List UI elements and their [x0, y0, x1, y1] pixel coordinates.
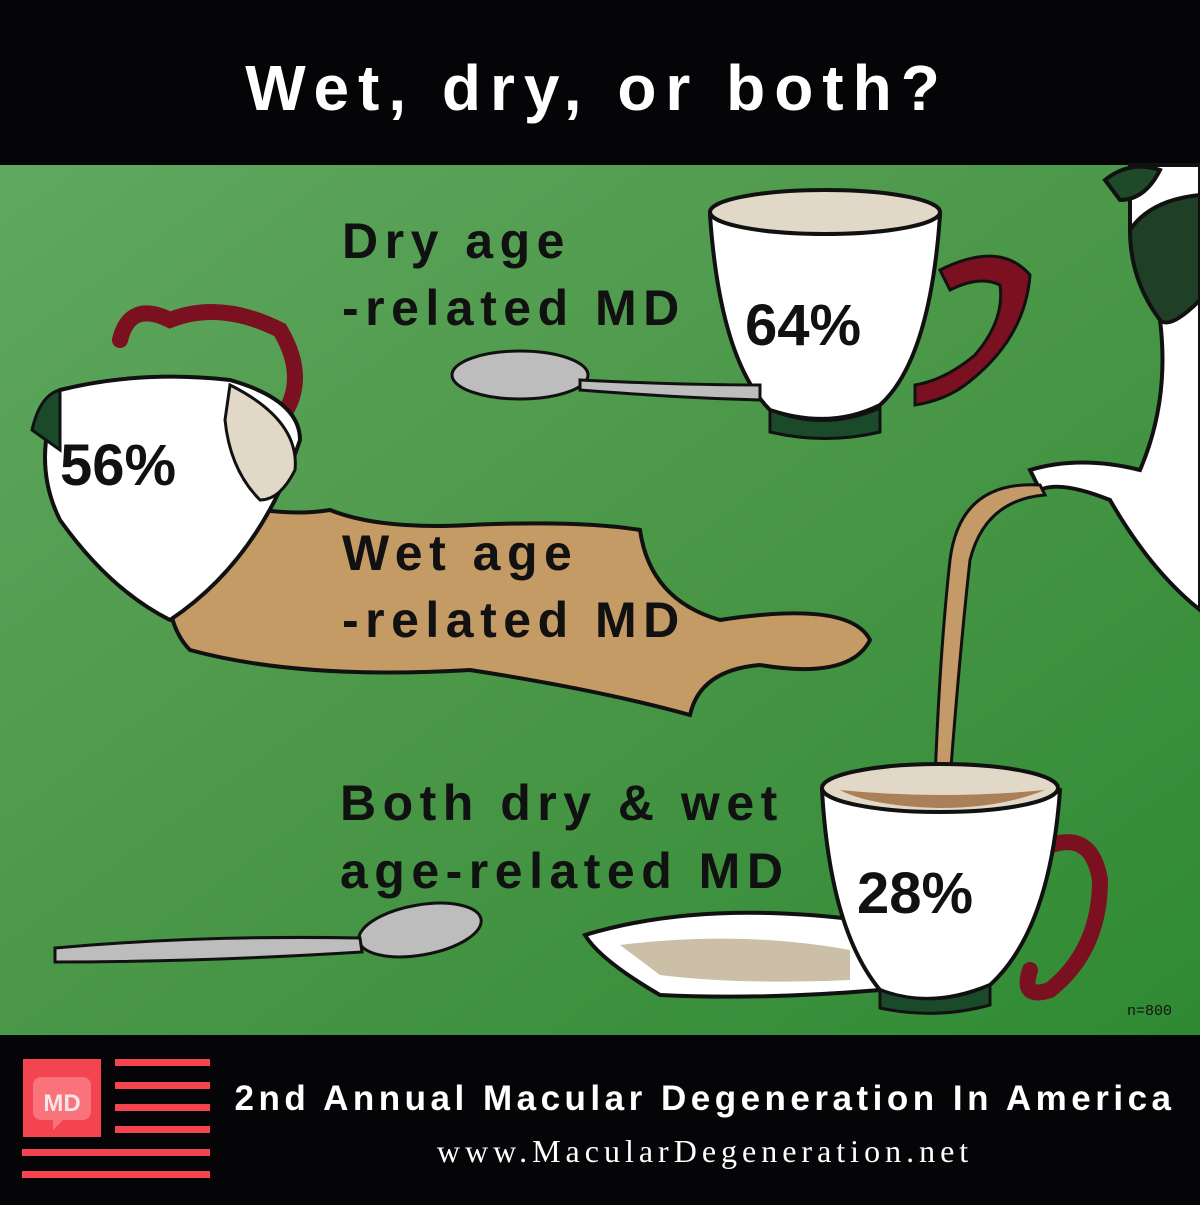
footer logo	[22, 1059, 210, 1178]
label: both: Both dry & wet	[340, 775, 784, 831]
title: Wet, dry, or both?	[245, 52, 949, 124]
footer title: 2nd Annual Macular Degeneration In America	[234, 1079, 1176, 1118]
label: wet: -related MD	[342, 592, 686, 648]
cup: wet 56%	[32, 312, 300, 620]
footer url: www.MacularDegeneration.net	[437, 1133, 973, 1169]
spoon bottom	[55, 895, 485, 965]
value 28%: 28%	[857, 861, 973, 926]
value 64%: 64%	[745, 293, 861, 358]
value 56%: 56%	[60, 433, 176, 498]
spoon top	[452, 351, 760, 400]
cup: dry 64%	[710, 190, 1030, 438]
green background panel	[0, 165, 1200, 1035]
label: both: age-related MD	[340, 843, 789, 899]
footer logo: MD	[43, 1090, 81, 1117]
label: dry: Dry age	[342, 213, 571, 269]
label: dry: -related MD	[342, 280, 686, 336]
teapot pouring	[935, 165, 1200, 780]
label: wet: Wet age	[342, 525, 578, 581]
saucer	[585, 913, 880, 997]
spill	[167, 490, 870, 715]
sample size: n=800	[1127, 1003, 1172, 1020]
cup: both 28%	[822, 764, 1100, 1013]
title bar	[0, 0, 1200, 165]
